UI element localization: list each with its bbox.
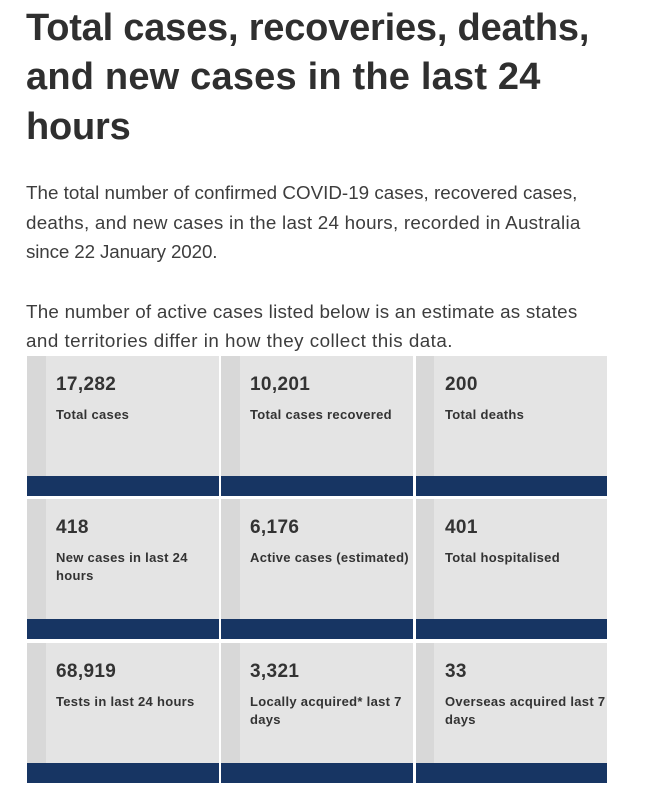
card: locally acquired: 3,321 [250, 661, 299, 682]
card: overseas acquired: 33 [445, 661, 467, 682]
statistics grid [27, 356, 607, 783]
intro paragraph: totals description: The total number of confirmed COVID-19 cases, recovered cases, [26, 182, 577, 203]
card: active cases: Active cases (estimated) [250, 550, 409, 565]
card: total cases: 17,282 [56, 374, 116, 395]
title [26, 7, 589, 148]
card: total cases recovered [221, 356, 413, 496]
card: total deaths [416, 356, 607, 496]
card: total deaths: Total deaths [445, 407, 524, 422]
card: tests in last 24 hours [27, 643, 219, 783]
card: locally acquired [221, 643, 413, 783]
card: total deaths: 200 [445, 374, 478, 395]
card: active cases [221, 499, 413, 639]
card: active cases: 6,176 [250, 517, 299, 538]
card: locally acquired: days [250, 712, 281, 726]
card: new cases in last 24 hours: New cases in last 24 [56, 550, 188, 565]
intro paragraph: active cases note [26, 301, 578, 351]
card: new cases in last 24 hours: hours [56, 568, 94, 582]
card: tests in last 24 hours: 68,919 [56, 661, 116, 682]
card: total cases [27, 356, 219, 496]
card: overseas acquired [416, 643, 607, 783]
card: new cases in last 24 hours: 418 [56, 517, 89, 538]
intro paragraph: totals description: since 22 January 2020. [26, 241, 217, 262]
intro paragraph: active cases note: The number of active cases listed below is an estimate as states [26, 301, 578, 322]
card: new cases in last 24 hours [27, 499, 219, 639]
intro paragraph: totals description [26, 182, 581, 262]
intro paragraph: active cases note: and territories differ in how they collect this data. [26, 330, 453, 351]
title: hours [26, 106, 131, 148]
card: tests in last 24 hours: Tests in last 24 hours [56, 694, 195, 709]
card: total hospitalised: Total hospitalised [445, 550, 560, 565]
card: total hospitalised [416, 499, 607, 639]
card: total hospitalised: 401 [445, 517, 478, 538]
card: total cases recovered: 10,201 [250, 374, 310, 395]
card: total cases recovered: Total cases recovered [250, 407, 392, 422]
card: overseas acquired: days [445, 712, 476, 726]
title: and new cases in the last 24 [26, 56, 541, 98]
title: Total cases, recoveries, deaths, [26, 7, 589, 49]
card: overseas acquired: Overseas acquired last 7 [445, 694, 605, 709]
card: total cases: Total cases [56, 407, 129, 422]
intro paragraph: totals description: deaths, and new cases in the last 24 hours, recorded in Australia [26, 212, 581, 233]
card: locally acquired: Locally acquired* last 7 [250, 694, 402, 709]
